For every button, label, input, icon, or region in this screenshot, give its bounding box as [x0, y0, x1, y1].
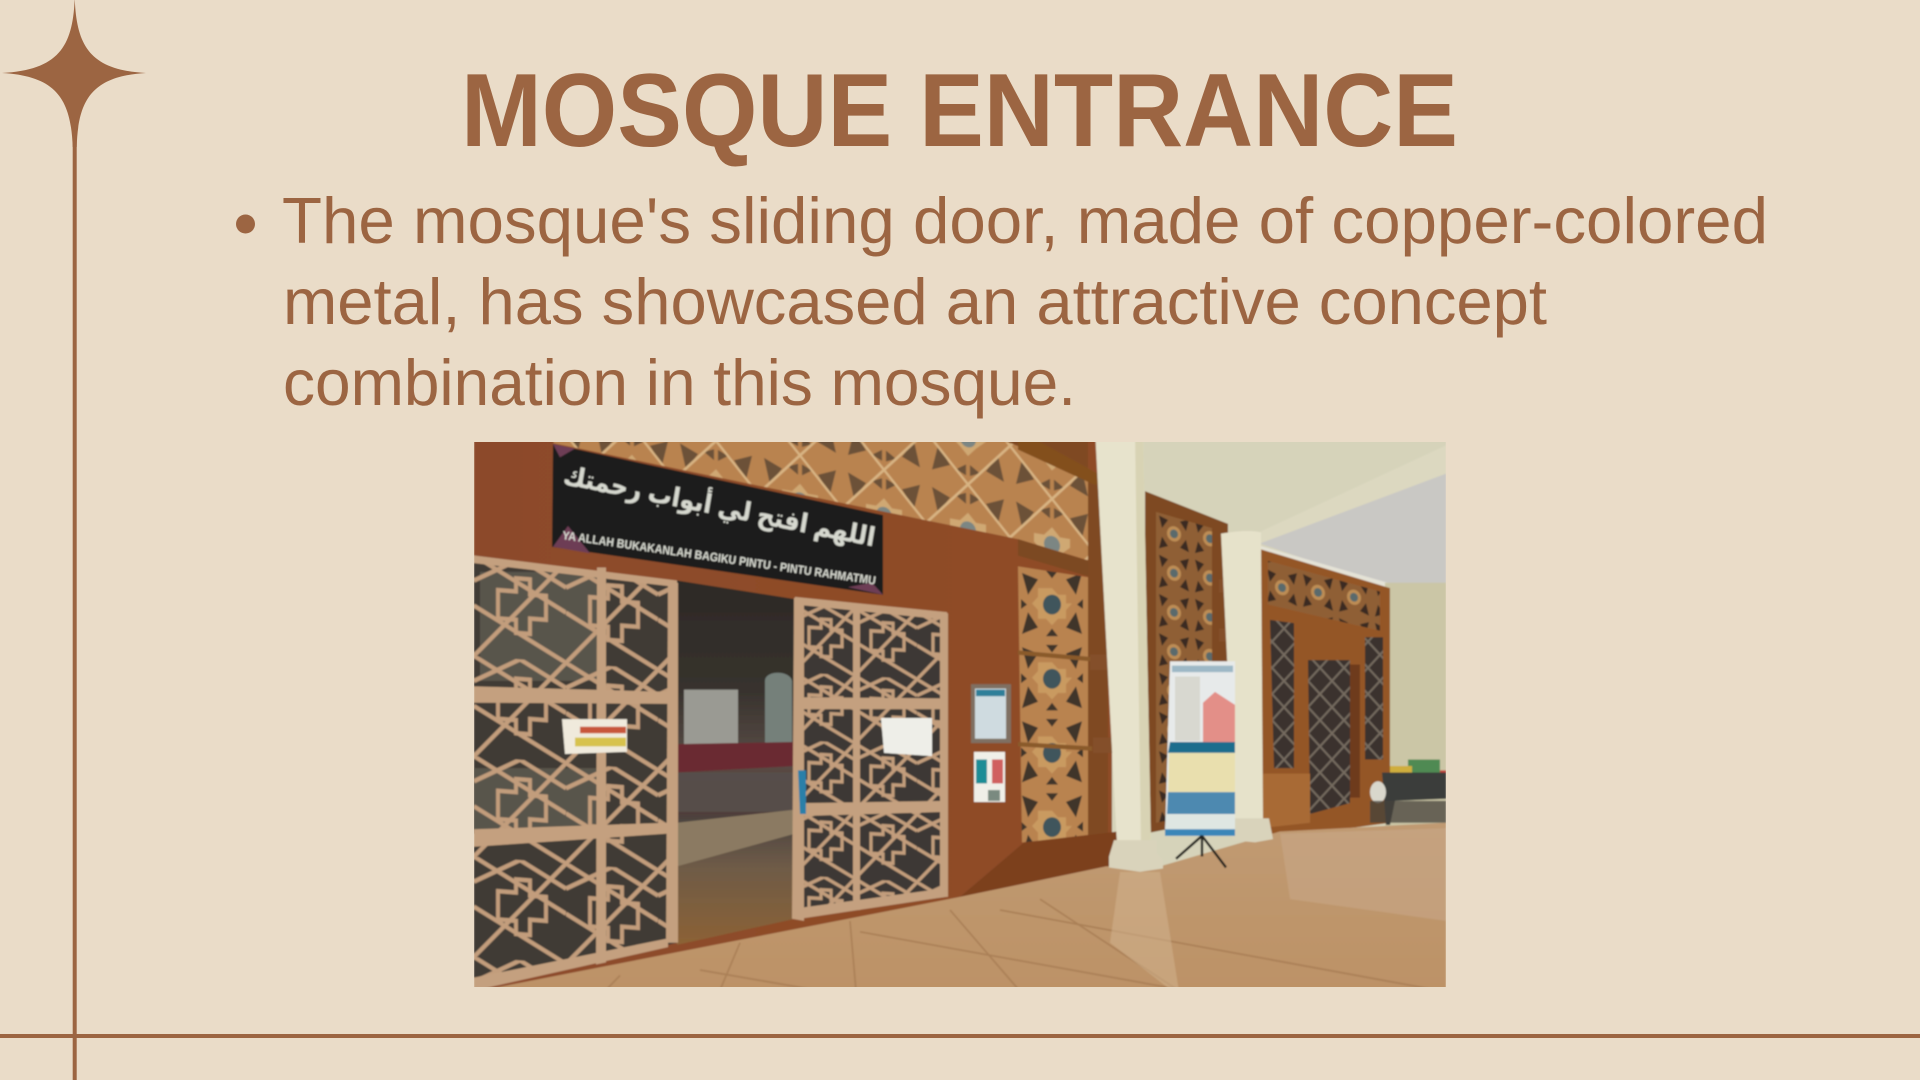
column bases: [1109, 818, 1273, 872]
interior opening: [677, 581, 795, 945]
text line 3: combination in this mosque.: [283, 346, 1076, 419]
upper lattice band: [553, 430, 1090, 561]
second wood panel: [1145, 491, 1233, 834]
lower wall plinth: [960, 831, 1118, 897]
notice boards: [971, 684, 1011, 802]
bullet text block: [236, 184, 1768, 419]
floor: [495, 822, 1446, 987]
overhead sign: [552, 444, 883, 595]
photo: mosque entrance: [474, 442, 1446, 987]
text line 2: metal, has showcased an attractive concept: [283, 265, 1547, 338]
table with items: [1370, 759, 1446, 825]
right sliding door: [792, 597, 948, 921]
wood frame top: [1006, 442, 1092, 486]
ceiling and walls: [1110, 442, 1446, 865]
text line 1: The mosque's sliding door, made of copper-colored: [282, 184, 1768, 257]
roll-up banner: [1165, 661, 1235, 867]
carved panel with stars: [1018, 566, 1088, 842]
decorative vertical line with four-point star: [2, 0, 146, 1080]
tripod: [1176, 836, 1226, 867]
door notice: [562, 719, 627, 754]
overhead sign: YA ALLAH BUKAKANLAH BAGIKU PINTU - PINTU RAHMATMU: [562, 530, 876, 588]
bullet marker: [236, 214, 255, 234]
floor tile lines: [608, 899, 1424, 987]
title: MOSQUE ENTRANCE: [461, 53, 1458, 169]
floor reflections: [1110, 872, 1178, 987]
columns: [1095, 430, 1263, 845]
blue strap: [798, 770, 806, 814]
overhead sign: اللهم افتح لي أبواب رحمتك: [561, 458, 878, 554]
third wood wall: [1256, 548, 1390, 834]
brown wall: [474, 430, 1112, 992]
door frame members: [474, 555, 678, 991]
frame rails: [1018, 650, 1090, 661]
decorative horizontal line: [0, 1034, 1920, 1038]
door notice: [881, 718, 932, 756]
left sliding door: [470, 555, 678, 991]
door frame members: [792, 597, 948, 921]
